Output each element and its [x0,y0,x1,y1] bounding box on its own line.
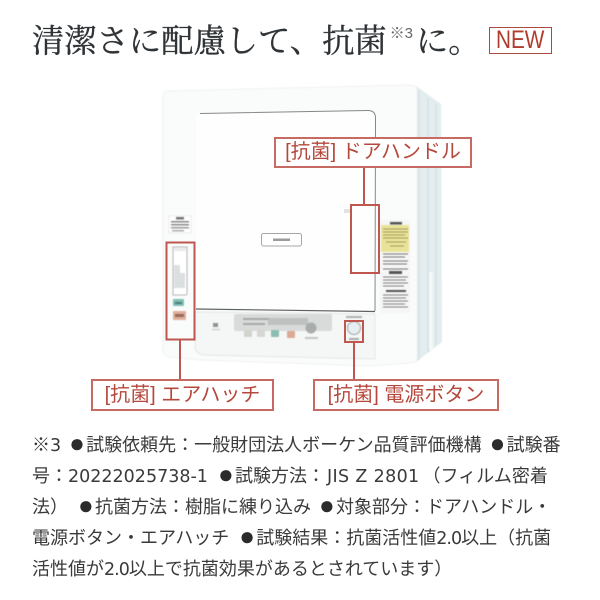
footnote text block: 電源ボタン・エアハッチ 試験結果：抗菌活性値2.0以上（抗菌 [32,528,551,549]
highlight: power button [345,321,363,379]
label: door handle [274,137,472,168]
control panel [195,312,375,359]
footnote text block: ● [239,521,255,551]
footnote text block: 活性値が2.0以上で抗菌効果があるとされています） [32,559,452,580]
footnote text block: ※3 試験依頼先：一般財団法人ボーケン品質評価機構 試験番 [32,435,561,456]
highlight: door handle [344,168,379,273]
footnote text block: ● [78,490,94,520]
highlight: air hatch [166,242,194,379]
footnote text block: ● [490,428,505,458]
dryer front body [163,85,417,366]
footnote text block [32,428,561,580]
footnote text block: ● [69,428,85,458]
footnote text block: ● [319,490,335,520]
label: air hatch: [抗菌] エアハッチ [105,384,260,406]
small notice sticker [169,216,191,233]
label: power button [313,379,499,411]
label: power button: [抗菌] 電源ボタン [328,384,484,406]
dryer side panel [416,86,442,362]
footnote text block: 号：20222025738-1 試験方法：JIS Z 2801（フィルム密着 [32,466,548,487]
label: air hatch [91,379,274,411]
dryer door [196,110,376,312]
air hatch [173,247,187,320]
title: 清潔さに配慮して、抗菌※3に。 [32,23,481,59]
label: door handle: [抗菌] ドアハンドル [285,141,461,163]
door logo plate [262,234,302,246]
footnote text block: ● [218,459,234,489]
power button [346,316,362,340]
footnote text block: 法） 抗菌方法：樹脂に練り込み 対象部分：ドアハンドル・ [32,497,551,517]
warning stickers [380,220,410,313]
